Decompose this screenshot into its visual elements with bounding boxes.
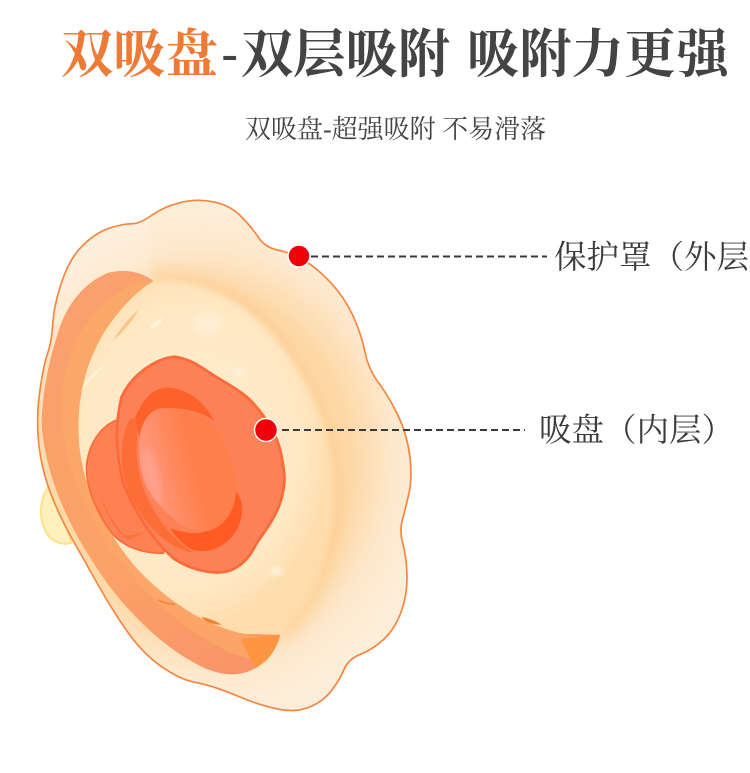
inner dome (70, 281, 334, 638)
marker: inner cup (254, 418, 278, 442)
marker: outer cover (288, 245, 310, 267)
icon: rear nipple (41, 487, 72, 544)
label: inner cup: 吸盘（内层） (539, 413, 734, 449)
orange rim band (42, 271, 280, 674)
collar top arc (135, 387, 214, 437)
leader line: inner cup (282, 429, 525, 431)
dome bumps (149, 312, 284, 575)
rim highlight stripe (61, 281, 273, 659)
subtitle: 双吸盘-超强吸附 不易滑落 (245, 115, 546, 144)
dome marks (80, 310, 222, 625)
cup collar left bands (122, 418, 195, 553)
label: outer cover: 保护罩（外层 (554, 240, 749, 276)
collar bottom arc (170, 492, 242, 551)
cup flange (117, 357, 285, 572)
orange wedge (241, 635, 280, 668)
tube inner shading (95, 473, 145, 540)
left lighter facet of cover (54, 216, 152, 325)
title (61, 26, 728, 84)
soft band around dome (153, 281, 334, 636)
outer protective cover (38, 200, 411, 710)
cup opening (139, 408, 237, 532)
inner suction cup (87, 357, 285, 572)
opening highlight (143, 447, 161, 505)
cup rear tube (87, 420, 180, 553)
title part two: 吸附力更强 (467, 26, 728, 84)
leader line: outer cover (311, 256, 547, 258)
title accent: 双吸盘 (61, 26, 218, 84)
title part one: 双层吸附 (241, 26, 450, 84)
title hyphen: - (221, 26, 238, 84)
